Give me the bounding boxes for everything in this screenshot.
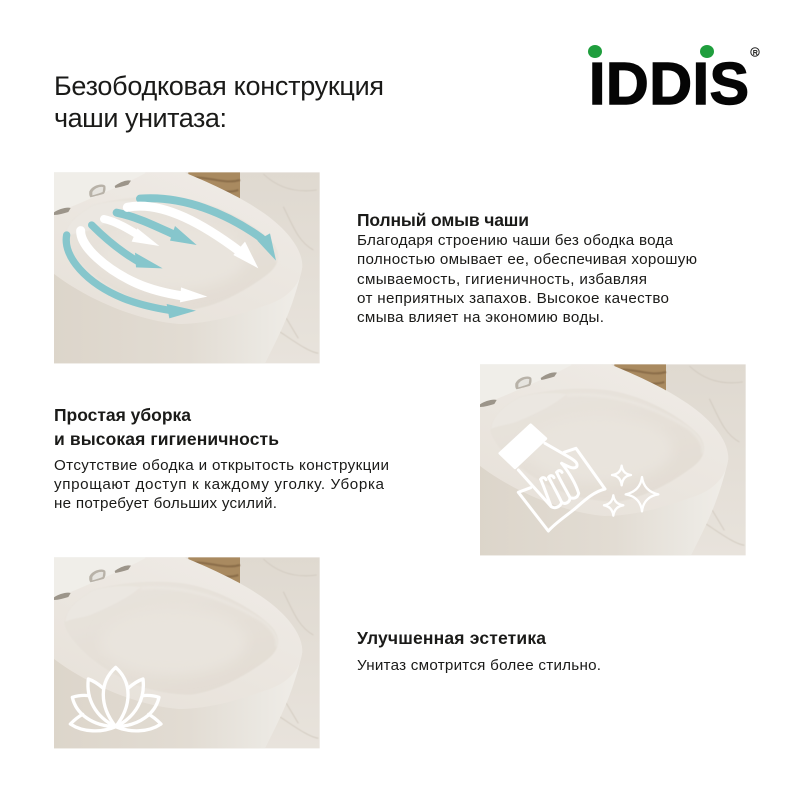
body: full rinse: от неприятных запахов. Высокое качество: [357, 290, 669, 307]
heading: easy cleaning: [54, 405, 279, 449]
title: Безободковая конструкция: [54, 71, 384, 101]
body: full rinse: смываемость, гигиеничность, избавляя: [357, 271, 647, 288]
body: full rinse: Благодаря строению чаши без ободка вода: [357, 232, 674, 249]
icon: white flow arrows: [81, 206, 258, 302]
panel: aesthetics photo with lotus icon: [50, 555, 320, 752]
heading: easy cleaning: Простая уборка: [54, 405, 191, 425]
title: [54, 71, 384, 133]
heading: easy cleaning: и высокая гигиеничность: [54, 429, 279, 449]
icon: sparkles: [604, 466, 658, 516]
heading: aesthetics: Улучшенная эстетика: [357, 628, 546, 648]
text block: aesthetics: [357, 628, 601, 674]
panel: full bowl rinse photo with water arrows: [50, 170, 320, 367]
body: easy cleaning: Отсутствие ободка и открытость конструкции: [54, 457, 389, 474]
body: easy cleaning: упрощают доступ к каждому уголку. Уборка: [54, 476, 385, 493]
body: aesthetics: Унитаз смотрится более стильно.: [357, 657, 601, 674]
body: full rinse: смыва влияет на экономию воды.: [357, 309, 604, 326]
icon: lotus: [70, 667, 161, 731]
panel: easy cleaning photo with hand icon: [476, 362, 746, 559]
body: easy cleaning: [54, 457, 389, 512]
logo: IDDIS: R: [753, 50, 758, 57]
logo: IDDIS: IDDIS: [589, 51, 749, 117]
text block: full rinse: [357, 210, 697, 326]
title: чаши унитаза:: [54, 103, 227, 133]
heading: full rinse: Полный омыв чаши: [357, 210, 529, 230]
icon: blue water flow arrows: [66, 198, 276, 318]
body: full rinse: полностью омывает ее, обеспечивая хорошую: [357, 251, 697, 268]
body: easy cleaning: не потребует больших усилий.: [54, 495, 277, 512]
text block: easy cleaning: [54, 405, 389, 512]
icon: hand wiping with cloth: [500, 425, 605, 531]
body: full rinse: [357, 232, 697, 326]
